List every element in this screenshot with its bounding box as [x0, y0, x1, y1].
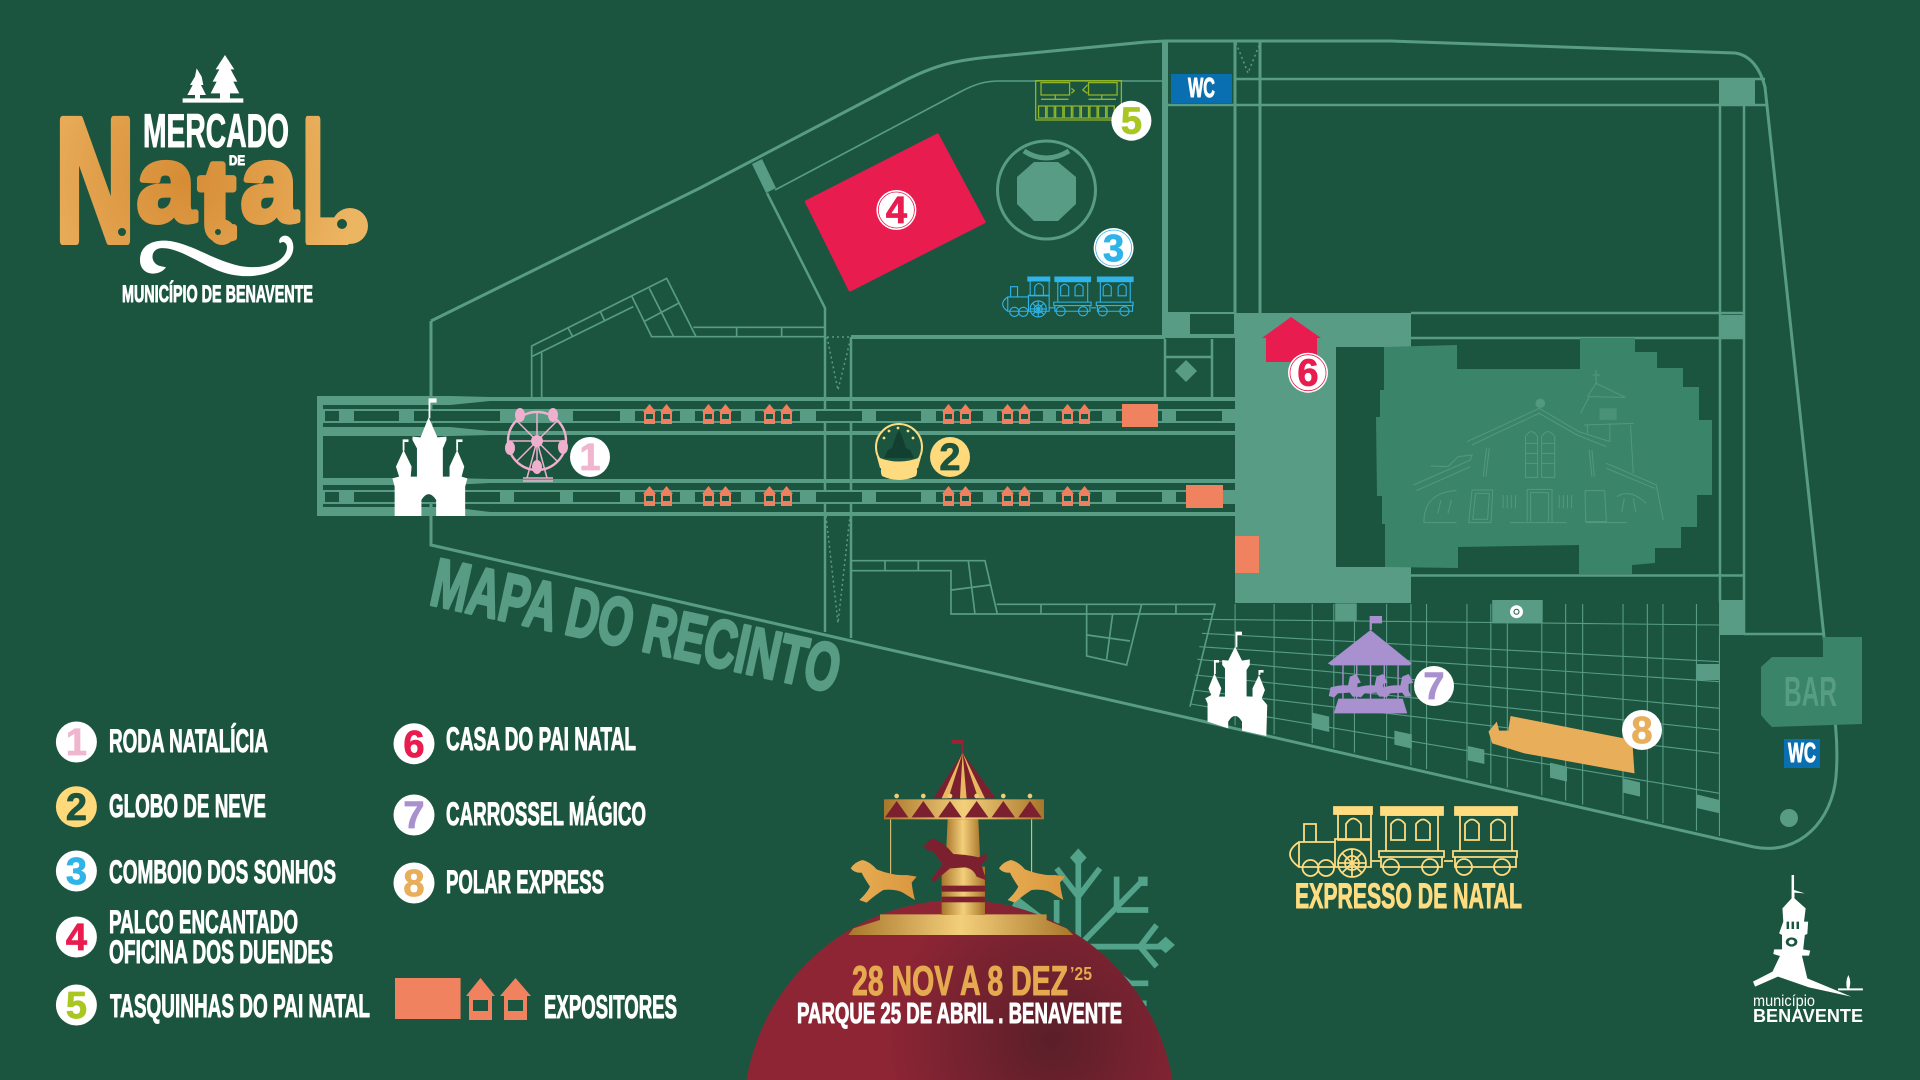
year: ’25	[1070, 964, 1092, 984]
map title: MAPA DO RECINTO	[425, 544, 847, 707]
south building outline	[852, 561, 1215, 707]
expositor blocks	[1122, 404, 1259, 573]
bar label: BAR	[1784, 668, 1837, 715]
snowflake decoration	[1013, 848, 1175, 1003]
badge 7	[1414, 666, 1454, 708]
legend item 1: RODA NATALÍCIA	[109, 723, 268, 759]
Natal lettering	[55, 83, 368, 279]
icon: ferris wheel	[505, 408, 568, 481]
badge 6	[1288, 353, 1328, 395]
logo: Mercado de Natal	[55, 55, 368, 308]
badge 5	[1111, 101, 1151, 143]
WC bottom: WC	[1788, 737, 1816, 768]
south grid	[1191, 600, 1719, 836]
place: PARQUE 25 DE ABRIL . BENAVENTE	[797, 998, 1122, 1030]
legend item 8: POLAR EXPRESS	[446, 864, 604, 900]
legend item 7: 7	[403, 795, 425, 837]
Natal lettering: N	[55, 83, 135, 279]
legend item 7: CARROSSEL MÁGICO	[446, 796, 646, 832]
BENAVENTE: BENAVENTE	[1753, 1006, 1863, 1026]
legend item 6: 6	[403, 724, 425, 766]
Expresso de Natal label: EXPRESSO DE NATAL	[1295, 877, 1522, 916]
bar block	[1761, 637, 1862, 727]
letter curls	[118, 219, 347, 236]
legend item 5: TASQUINHAS DO PAI NATAL	[110, 988, 370, 1024]
logo: Município de Benavente	[1753, 875, 1863, 1026]
icon: snow globe	[876, 424, 922, 480]
legend item 2	[56, 786, 266, 829]
dotted V paths	[826, 43, 1260, 623]
legend item 6	[394, 721, 636, 766]
Natal lettering: L	[302, 83, 350, 279]
canopy	[884, 794, 1044, 819]
legend item 4: PALCO ENCANTADO	[109, 904, 298, 940]
upper-left road and gate	[752, 41, 1823, 638]
WC top: WC	[1188, 72, 1215, 103]
horse left	[851, 860, 917, 903]
church line drawing	[1414, 370, 1663, 523]
badge 5: 5	[1121, 101, 1142, 143]
icon: Polar Express silhouette	[1489, 716, 1635, 773]
legend item 2: GLOBO DE NEVE	[109, 788, 266, 824]
Natal lettering: t	[199, 137, 235, 262]
icon: Casa do Pai Natal	[1262, 317, 1321, 362]
church garden	[1376, 338, 1712, 574]
red bauble with carousel	[746, 740, 1172, 1080]
legend item 8: 8	[403, 863, 425, 905]
horse right	[999, 860, 1065, 903]
badge 6: 6	[1297, 353, 1319, 395]
badge 8: 8	[1631, 710, 1653, 752]
município: município	[1753, 993, 1815, 1010]
legend item 5: 5	[66, 985, 87, 1027]
legend item 3: COMBOIO DOS SONHOS	[109, 854, 336, 890]
roundabout dot	[1780, 809, 1798, 827]
cone roof	[933, 740, 996, 798]
rods	[891, 819, 1032, 875]
legend item 3: 3	[66, 851, 87, 893]
dates: 28 NOV A 8 DEZ	[852, 957, 1068, 1004]
map: site plan lines	[317, 41, 1862, 848]
legend item 7	[394, 794, 646, 837]
icon: trees	[183, 55, 243, 103]
north-west building outline	[532, 278, 825, 398]
legend item 4: 4	[66, 917, 87, 959]
bauble	[746, 900, 1172, 1080]
badge 4: 4	[886, 190, 907, 232]
expositor houses lower row	[643, 486, 1091, 506]
legend item 2: 2	[66, 787, 87, 829]
badge 1: 1	[579, 437, 601, 479]
legend item 4	[56, 904, 333, 970]
icon: clock tower	[1753, 875, 1863, 997]
DE: DE	[229, 152, 245, 168]
legend	[56, 721, 677, 1027]
WC top	[1171, 72, 1232, 103]
platform	[848, 914, 1073, 935]
corner blocks	[1164, 79, 1755, 635]
legend item 4: OFICINA DOS DUENDES	[109, 934, 333, 970]
horse centre	[923, 838, 987, 882]
castle at entrance	[392, 398, 467, 516]
MERCADO: MERCADO	[143, 104, 289, 157]
badge 2	[930, 437, 970, 479]
badge 8	[1622, 710, 1662, 752]
swirl ornament	[140, 236, 293, 276]
badge 2: 2	[939, 437, 961, 479]
bandstand circle	[998, 141, 1096, 239]
legend item 1: 1	[66, 722, 87, 764]
avenue rows	[317, 396, 1235, 516]
legend item 8	[394, 862, 604, 905]
badge 3: 3	[1103, 228, 1124, 270]
stage 4	[806, 135, 984, 290]
column	[942, 819, 985, 915]
castle in south grid	[1205, 632, 1267, 736]
legend expositores: EXPOSITORES	[544, 989, 677, 1025]
icon: purple carousel	[1328, 616, 1413, 713]
badge 3	[1094, 228, 1134, 270]
legend item 3	[56, 850, 336, 893]
icon: Expresso de Natal train	[1290, 807, 1517, 877]
legend expositores	[395, 978, 677, 1025]
small marker in grid	[1510, 605, 1523, 618]
badge 4	[876, 190, 916, 232]
legend item 1	[56, 722, 268, 764]
large plaza	[1235, 313, 1411, 603]
outer boundary of the park	[431, 41, 1837, 848]
Natal lettering: a	[241, 123, 298, 244]
Município de Benavente: MUNICÍPIO DE BENAVENTE	[122, 280, 313, 308]
icon: blue train	[1003, 277, 1133, 317]
WC bottom	[1784, 737, 1820, 768]
badge 7: 7	[1423, 666, 1445, 708]
Natal lettering: a	[137, 123, 196, 244]
legend item 5	[56, 984, 370, 1027]
badge 1	[570, 437, 610, 479]
icon: tasquinhas stalls	[1036, 81, 1121, 120]
legend item 6: CASA DO PAI NATAL	[446, 721, 636, 757]
expositor houses upper row	[643, 404, 1091, 424]
